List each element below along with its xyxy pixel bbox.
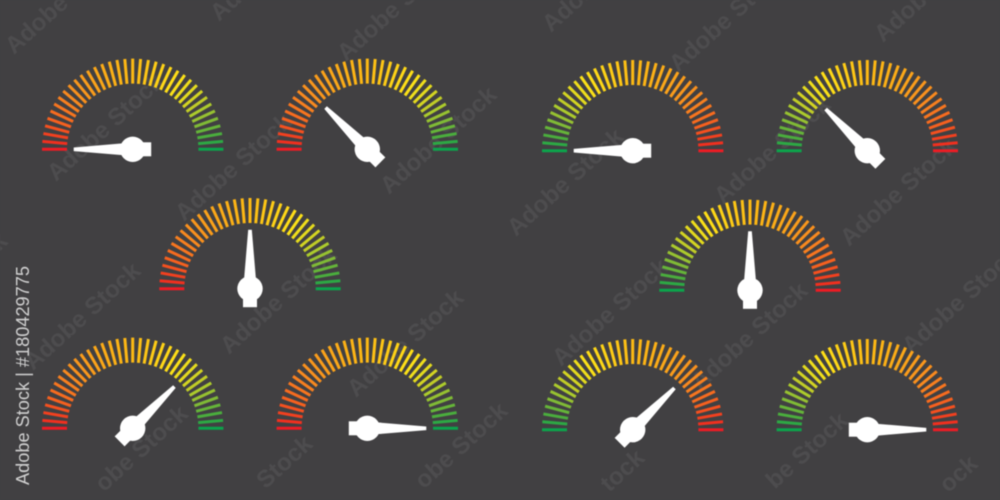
gauge: red-to-green, needle centre — [159, 198, 341, 307]
watermark pattern: Adobe Stock — [686, 277, 814, 395]
gauge: red-to-green, needle upper left — [277, 59, 458, 171]
gauge: red-to-green, needle far right — [277, 338, 458, 441]
gauge: green-to-red, needle centre — [659, 200, 841, 309]
watermark pattern: Adobe Stock — [42, 68, 170, 186]
watermark pattern: Stock — [251, 430, 318, 494]
watermark pattern: tock — [595, 444, 650, 497]
watermark pattern: obe Stock — [90, 400, 194, 497]
side credit text: Adobe Stock | #180429775 — [12, 266, 33, 485]
watermark pattern: be Stock — [761, 407, 854, 494]
watermark pattern: Adobe Stock — [19, 257, 147, 375]
watermark pattern: obe Stock — [410, 397, 514, 494]
gauge: red-to-green, needle far left — [42, 59, 223, 162]
watermark pattern: Adobe Stock — [835, 133, 963, 251]
watermark pattern: Adobe Stock — [502, 123, 630, 241]
gauge: green-to-red, needle far right — [777, 339, 958, 442]
gauge: green-to-red, needle upper right — [542, 339, 723, 452]
watermark pattern: Adobe Stock — [547, 253, 675, 371]
watermark pattern: Adobe Stock — [709, 91, 837, 209]
watermark pattern: Adobe Stock — [375, 81, 503, 199]
gauge: green-to-red, needle far left — [542, 60, 723, 163]
watermark pattern: Adobe Stock — [342, 284, 470, 402]
watermark pattern: ock — [934, 450, 984, 498]
watermark pattern: Adobe Stock — [215, 241, 343, 359]
gauge: red-to-green, needle upper right — [42, 338, 223, 450]
gauge: green-to-red, needle upper left — [777, 60, 958, 173]
watermark pattern: Adobe Stock — [170, 108, 298, 226]
